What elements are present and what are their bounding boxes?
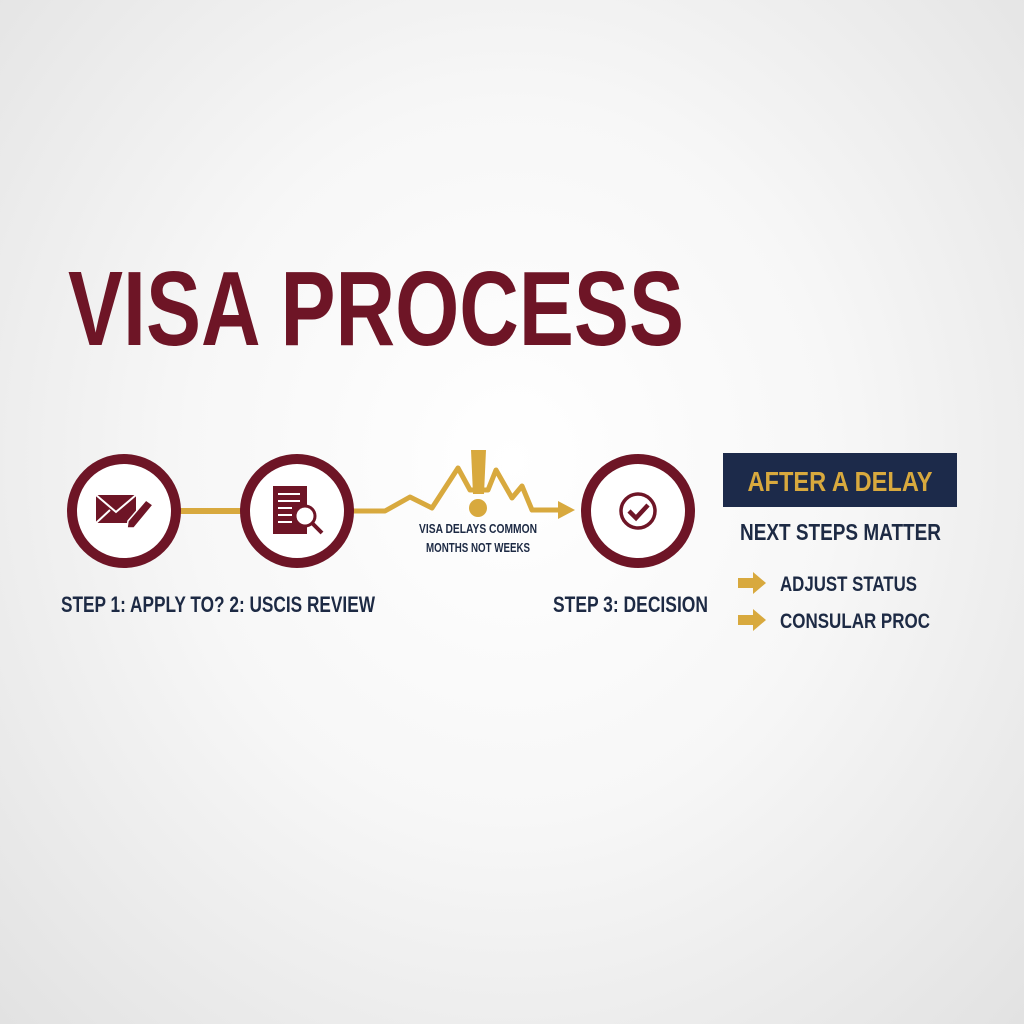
step labels 1 & 2: STEP 1: APPLY TO? 2: USCIS REVIEW <box>61 592 375 617</box>
step 3 label: STEP 3: DECISION <box>553 592 708 617</box>
icon: exclamation <box>469 450 487 517</box>
delay note text <box>419 521 537 555</box>
step 3 circle with check icon <box>586 459 690 563</box>
panel: after a delay <box>723 453 957 507</box>
step 2 circle with document magnifier icon <box>245 459 349 563</box>
delay note text: MONTHS NOT WEEKS <box>426 540 530 555</box>
list item: consular proc: CONSULAR PROC <box>780 610 930 633</box>
delay note text: VISA DELAYS COMMON <box>419 521 537 536</box>
subheading: NEXT STEPS MATTER <box>740 519 941 545</box>
title: VISA PROCESS <box>68 250 684 368</box>
list item: adjust status: ADJUST STATUS <box>780 573 917 596</box>
zigzag delay path with arrow <box>353 468 575 519</box>
panel: after a delay: AFTER A DELAY <box>748 466 933 497</box>
list item: consular proc <box>738 609 930 633</box>
connector line step1 to step2 <box>180 508 242 514</box>
step 1 circle with envelope icon <box>72 459 176 563</box>
list item: adjust status <box>738 572 917 596</box>
